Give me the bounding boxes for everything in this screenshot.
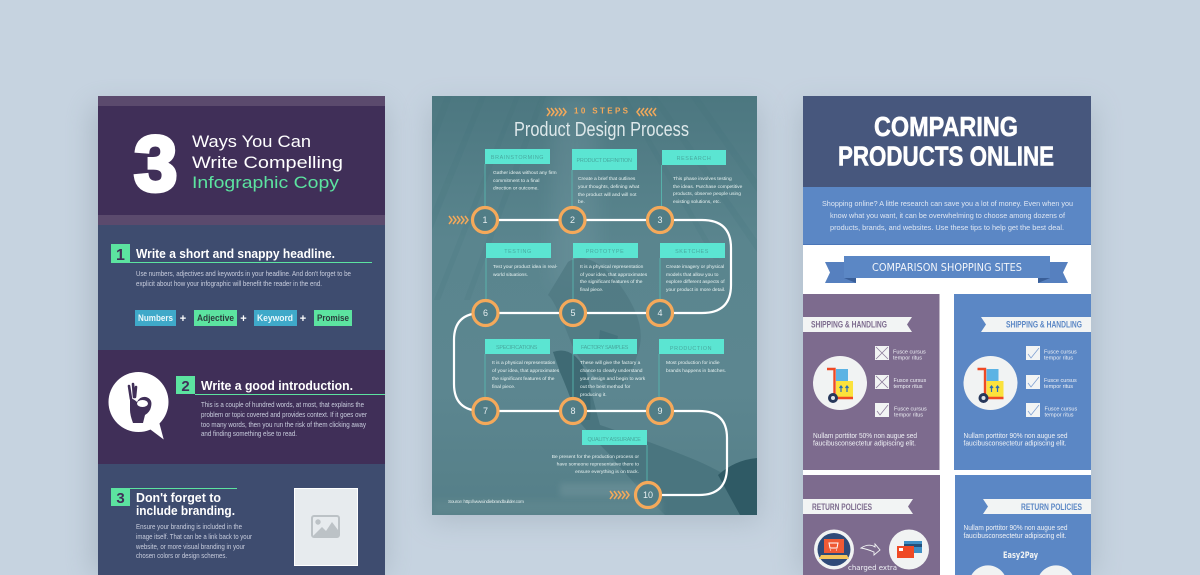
icon: ok hand speech bubble bbox=[108, 372, 168, 437]
brand circles bbox=[972, 565, 1072, 575]
icon: end chevrons bbox=[610, 491, 629, 499]
checklist: tempor ritus bbox=[893, 356, 922, 362]
formula pills bbox=[135, 310, 352, 326]
body 1 bbox=[136, 269, 351, 288]
ribbon bbox=[803, 499, 913, 514]
heading 2: Write a good introduction. bbox=[201, 378, 353, 393]
intro band bbox=[803, 187, 1091, 245]
section 2 bbox=[98, 350, 385, 464]
step descriptions: These will give the factory a bbox=[580, 360, 641, 366]
step descriptions: the significant features of the bbox=[492, 376, 555, 382]
body 3: Ensure your branding is included in the bbox=[136, 522, 242, 531]
ribbon bbox=[983, 499, 1091, 514]
body 2 bbox=[201, 400, 367, 438]
checklist: Fusce cursus bbox=[893, 350, 926, 356]
heading 3 bbox=[136, 490, 235, 518]
step numbers: 4 bbox=[657, 308, 663, 318]
section 1 bbox=[98, 225, 385, 350]
formula pills: Promise bbox=[317, 313, 349, 323]
step descriptions: It is a physical representation bbox=[492, 360, 556, 366]
title: COMPARING bbox=[874, 111, 1018, 142]
body 2: This is a couple of hundred words, at most, that explains the bbox=[201, 400, 364, 409]
title bbox=[192, 133, 343, 192]
card: returns purple: RETURN POLICIES bbox=[812, 502, 872, 512]
heading 3: Don't forget to bbox=[136, 490, 221, 505]
checklist: tempor ritus bbox=[1044, 412, 1074, 418]
text: faucibusconsectetur adipiscing elit. bbox=[964, 533, 1067, 540]
step descriptions: of your idea, that approximates bbox=[580, 272, 648, 278]
checklist: Fusce cursus bbox=[1044, 378, 1077, 384]
title: PRODUCTS ONLINE bbox=[838, 140, 1054, 172]
step labels bbox=[491, 155, 712, 443]
icon: arrow bbox=[861, 544, 880, 555]
header bbox=[803, 96, 1091, 187]
step descriptions: Test your product idea in real- bbox=[493, 264, 558, 270]
step descriptions: have someone representative there to bbox=[557, 462, 639, 468]
title: Ways You Can bbox=[192, 133, 311, 151]
step labels: PROTOTYPE bbox=[586, 249, 624, 255]
checklist: tempor ritus bbox=[1044, 356, 1073, 362]
ribbon bbox=[981, 317, 1091, 332]
step descriptions: of your idea, that approximates bbox=[492, 368, 560, 374]
heading 1: Write a short and snappy headline. bbox=[136, 246, 335, 261]
ribbon heading: COMPARISON SHOPPING SITES bbox=[872, 262, 1022, 274]
formula pills: Adjective bbox=[197, 313, 234, 323]
section 3 bbox=[98, 464, 385, 575]
step descriptions: Most production for indie bbox=[666, 360, 720, 366]
intro band: know what you want, it can be overwhelming to choose among dozens of bbox=[830, 211, 1066, 220]
card: returns purple bbox=[803, 475, 940, 575]
text bbox=[964, 525, 1068, 540]
checklist bbox=[875, 346, 927, 418]
icon: shopping laptop bbox=[814, 530, 854, 570]
formula pills: + bbox=[300, 313, 306, 325]
formula pills: Numbers bbox=[138, 313, 173, 323]
step labels: FACTORY SAMPLES bbox=[581, 345, 629, 351]
intro band: Shopping online? A little research can save you a lot of money. Even when you bbox=[822, 199, 1073, 208]
step descriptions bbox=[492, 170, 743, 475]
step descriptions: your design and begin to work bbox=[580, 376, 646, 382]
step numbers: 5 bbox=[570, 308, 576, 318]
step labels: PRODUCT DEFINITION bbox=[576, 158, 632, 164]
icon: start chevrons bbox=[449, 216, 468, 224]
step descriptions: Create imagery or physical bbox=[666, 264, 724, 270]
step descriptions: Be present for the production process or bbox=[552, 454, 639, 460]
checklist: Fusce cursus bbox=[1044, 350, 1077, 356]
step numbers bbox=[482, 215, 663, 500]
step descriptions: final piece. bbox=[492, 384, 515, 390]
checklist: Fusce cursus bbox=[894, 378, 926, 384]
card: returns blue bbox=[955, 475, 1091, 575]
panel: product design process bbox=[432, 96, 757, 515]
title: Infographic Copy bbox=[192, 174, 340, 192]
step descriptions: brands happens in batches. bbox=[666, 368, 726, 374]
step descriptions: final piece. bbox=[580, 287, 603, 293]
step descriptions: direction or outcome. bbox=[493, 186, 539, 192]
title: Write Compelling bbox=[192, 154, 343, 172]
image placeholder bbox=[294, 488, 358, 566]
body 2: and finding something else to read. bbox=[201, 429, 297, 438]
intro band: products, brands, and websites. Use these tips to help get the best deal. bbox=[830, 223, 1064, 232]
step labels: TESTING bbox=[504, 249, 532, 255]
header band bbox=[98, 96, 385, 225]
heading: 10 steps: 10 STEPS bbox=[574, 106, 629, 116]
body 1: explicit about how your infographic will benefit the reader in the end. bbox=[136, 279, 322, 288]
icon: hand truck bbox=[813, 356, 867, 410]
text: Nullam porttitor 90% non augue sed bbox=[964, 433, 1068, 440]
step descriptions: existing solutions, etc. bbox=[673, 199, 721, 205]
step descriptions: ensure everything is on track. bbox=[575, 469, 639, 475]
step numbers: 10 bbox=[643, 490, 653, 500]
body 1: Use numbers, adjectives and keywords in your headline. And don't forget to be bbox=[136, 269, 351, 278]
text: Nullam porttitor 90% non augue sed bbox=[964, 525, 1068, 532]
card: shipping purple bbox=[803, 294, 940, 470]
step descriptions: models that allow you to bbox=[666, 272, 719, 278]
number badge 1: 1 bbox=[116, 247, 125, 264]
step descriptions: your thoughts, defining what bbox=[578, 184, 640, 190]
checklist: tempor ritus bbox=[894, 384, 923, 390]
step descriptions: the significant features of the bbox=[580, 279, 643, 285]
step circles bbox=[472, 208, 672, 508]
text: faucibusconsectetur adipiscing elit. bbox=[964, 440, 1067, 448]
panel: comparing products online bbox=[803, 96, 1091, 575]
step descriptions: products, observe people using bbox=[673, 191, 741, 197]
card: shipping purple: SHIPPING & HANDLING bbox=[811, 320, 887, 330]
step numbers: 9 bbox=[657, 406, 663, 416]
caption: charged extra bbox=[848, 564, 897, 572]
text bbox=[964, 433, 1068, 448]
step labels: PRODUCTION bbox=[670, 346, 712, 352]
title: Product Design Process bbox=[514, 119, 689, 141]
step labels: SPECIFICATIONS bbox=[496, 345, 538, 351]
step label boxes bbox=[485, 149, 726, 445]
body 3: image itself. That can be a link back to your bbox=[136, 532, 252, 541]
number badge 2: 2 bbox=[181, 378, 190, 395]
process path bbox=[454, 220, 731, 495]
step numbers: 7 bbox=[483, 406, 488, 416]
step descriptions: This phase involves testing bbox=[673, 176, 732, 182]
step descriptions: the product will and will not bbox=[578, 192, 637, 198]
step descriptions: It is a physical representation bbox=[580, 264, 644, 270]
panel: 3 ways infographic bbox=[98, 96, 385, 575]
text: Nullam porttitor 50% non augue sed bbox=[813, 433, 917, 440]
big numeral 3: 3 bbox=[134, 120, 177, 208]
number badge 3: 3 bbox=[116, 490, 125, 507]
body 2: problem or topic covered and provides context. If it goes over bbox=[201, 410, 367, 419]
checklist: Fusce cursus bbox=[894, 406, 927, 412]
infographic showcase bbox=[84, 96, 1100, 575]
title bbox=[839, 116, 1054, 166]
checklist: tempor ritus bbox=[1044, 384, 1073, 390]
text: faucibusconsectetur adipiscing elit. bbox=[813, 440, 916, 448]
number badge 1 bbox=[111, 244, 130, 264]
icon: hand truck bbox=[964, 356, 1018, 410]
brand name: Easy2Pay bbox=[1003, 551, 1038, 561]
step descriptions: commitment to a final bbox=[493, 178, 539, 184]
step numbers: 6 bbox=[483, 308, 488, 318]
checklist: tempor ritus bbox=[894, 412, 923, 418]
step numbers: 8 bbox=[570, 406, 576, 416]
source: Source: http://www.indiebrandbuilder.com bbox=[448, 499, 524, 505]
body 3: chosen colors or design schemes. bbox=[136, 551, 227, 560]
step descriptions: your product in more detail. bbox=[666, 287, 725, 293]
step numbers: 3 bbox=[657, 215, 663, 225]
body 2: too many words, then you run the risk of them clicking away bbox=[201, 420, 366, 429]
step descriptions: Create a brief that outlines bbox=[578, 176, 636, 182]
formula pills: + bbox=[240, 313, 247, 325]
checklist: Fusce cursus bbox=[1044, 406, 1077, 412]
step descriptions: explore different aspects of bbox=[666, 279, 725, 285]
icon: heading chevrons bbox=[547, 108, 656, 116]
step descriptions: world situations. bbox=[493, 272, 528, 278]
background photo: light, rays, shoe, hand and arm bbox=[548, 100, 757, 515]
ribbon bbox=[803, 317, 912, 332]
step descriptions: chance to clearly understand bbox=[580, 368, 643, 374]
step descriptions: out the best method for bbox=[580, 384, 631, 390]
body 3 bbox=[135, 522, 252, 560]
step descriptions: the ideas. Purchase competitive bbox=[673, 184, 743, 190]
body 3: website, or more visual branding in your bbox=[135, 542, 245, 551]
icon: credit cards bbox=[889, 530, 929, 570]
number badge 3 bbox=[111, 488, 130, 507]
step labels: RESEARCH bbox=[677, 156, 711, 162]
number badge 2 bbox=[176, 376, 195, 395]
card: shipping blue bbox=[954, 294, 1091, 470]
checklist bbox=[1026, 346, 1077, 418]
step descriptions: be. bbox=[578, 199, 585, 205]
formula pills: Keyword bbox=[257, 313, 293, 323]
step descriptions: Gather ideas without any firm bbox=[493, 170, 557, 176]
connector stems bbox=[485, 164, 662, 482]
card: shipping blue: SHIPPING & HANDLING bbox=[1006, 320, 1082, 330]
ribbon heading bbox=[825, 256, 1068, 283]
formula pills: + bbox=[180, 313, 186, 325]
text bbox=[813, 433, 917, 448]
step numbers: 1 bbox=[482, 215, 488, 225]
step labels: QUALITY ASSURANCE bbox=[588, 437, 642, 443]
step numbers: 2 bbox=[570, 215, 575, 225]
heading 3: include branding. bbox=[136, 503, 235, 518]
step labels: BRAINSTORMING bbox=[491, 155, 544, 161]
step labels: SKETCHES bbox=[675, 249, 709, 255]
step descriptions: producing it. bbox=[580, 392, 607, 398]
card: returns blue: RETURN POLICIES bbox=[1021, 502, 1082, 512]
